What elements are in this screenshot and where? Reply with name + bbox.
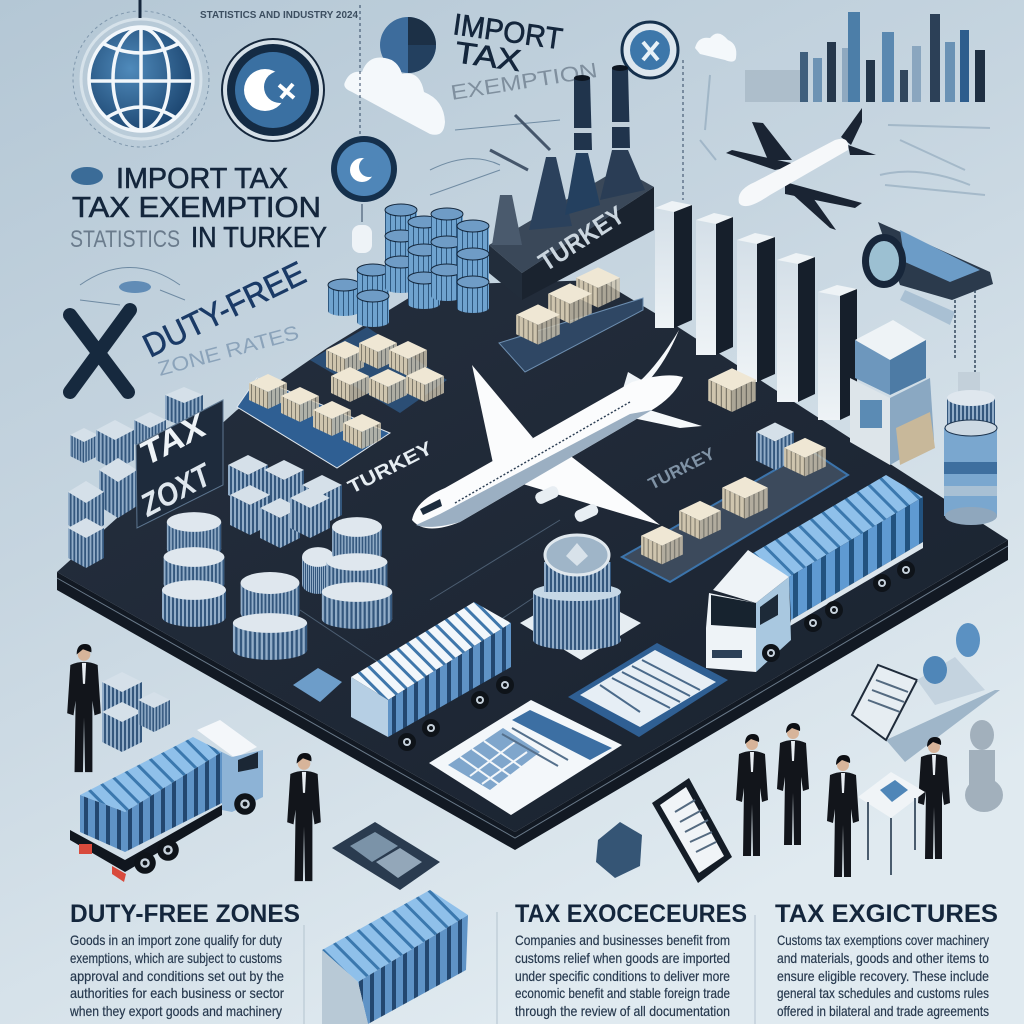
title: STATISTICS: [70, 226, 180, 253]
sign: tax zone: ZOXT: [134, 456, 219, 524]
icon: small crescent badge: [331, 136, 397, 222]
body text: ensure eligible recovery. These include: [777, 968, 989, 984]
dashed connector: [360, 5, 683, 200]
icon: globe: [73, 0, 209, 147]
body text: general tax schedules and customs rules: [777, 985, 989, 1001]
title: [70, 163, 327, 254]
truck: bottom centre: [322, 890, 468, 1024]
header microtext: STATISTICS AND INDUSTRY 2024: [200, 10, 358, 21]
icon: pie circle: [380, 17, 436, 73]
device small: [596, 822, 642, 878]
robot figure: [965, 720, 1003, 812]
body text: Goods in an import zone qualify for duty: [70, 932, 282, 948]
pallet: [332, 822, 440, 890]
body text: Companies and businesses benefit from: [515, 932, 730, 948]
panel: duty-free zones: DUTY-FREE ZONES: [70, 900, 300, 928]
building right: [850, 320, 935, 465]
crate cluster upper centre: [326, 334, 444, 404]
icon: factory: TURKEY: [533, 200, 630, 277]
tray: crates upper centre: [310, 327, 447, 413]
icon: tall buildings left: [68, 387, 203, 568]
icon: small plane: [726, 108, 876, 230]
body text: economic benefit and stable foreign trade: [515, 985, 730, 1001]
crates under factory: [516, 267, 620, 345]
right tower: [944, 372, 997, 525]
panel: isometric platform: [57, 280, 1008, 850]
body text: authorities for each business or sector: [70, 985, 284, 1001]
document: calculator sheet: [429, 700, 622, 815]
tray: crates back right: [499, 298, 643, 372]
crate solo: [708, 368, 756, 412]
icon: small tag: [352, 225, 372, 253]
top heading: [449, 8, 599, 105]
panel: duty-free zones: [69, 900, 300, 1019]
crate stack centre left: [228, 455, 342, 548]
icon: Turkey crescent badge: [222, 39, 324, 141]
top heading: EXEMPTION: [449, 59, 599, 105]
icon: camera device: [862, 222, 993, 400]
crate cluster right: [641, 422, 826, 564]
figure: left businessman: [67, 644, 101, 772]
body text: exemptions, which are subject to customs: [70, 950, 282, 966]
label: Turkey faded: TURKEY: [645, 444, 719, 494]
icon: X badge: [622, 22, 678, 78]
document: tablet on board: [568, 643, 728, 737]
icon: cloud: [344, 58, 445, 135]
sketch notes right: [700, 75, 990, 195]
display stand: [852, 623, 1000, 762]
container: mid truck: [351, 602, 514, 751]
small device on board: [293, 668, 342, 702]
body text: when they export goods and machinery: [69, 1003, 282, 1019]
body text: [69, 932, 284, 1019]
faded subtitle: ZONE RATES: [156, 322, 301, 381]
white pillars: [655, 201, 857, 420]
body text: and materials, goods and other items to: [777, 950, 989, 966]
sign: tax zone: [133, 400, 223, 528]
table: [858, 772, 925, 875]
panel: tax exemptions: TAX EXGICTURES: [775, 900, 998, 928]
tablet: [652, 778, 732, 883]
tray: crates right: [622, 450, 848, 582]
title: IN TURKEY: [191, 222, 327, 254]
body text: offered in bilateral and trade agreements: [777, 1003, 989, 1019]
bar chart: [745, 12, 985, 102]
body text: [777, 932, 989, 1019]
icon: X mark: [70, 310, 130, 392]
body text: under specific conditions to deliver more: [515, 968, 730, 984]
truck: bottom left: [70, 720, 263, 882]
duty-free heading: DUTY-FREE: [137, 254, 311, 364]
title: IMPORT TAX: [116, 163, 288, 195]
label: Turkey on board: TURKEY: [345, 438, 437, 498]
body text: [515, 932, 730, 1019]
icon: main airplane: [412, 330, 702, 529]
top heading: TAX: [453, 36, 523, 78]
panel: tax exemptions: [775, 900, 998, 1019]
big truck: [706, 475, 923, 672]
title: TAX EXEMPTION: [72, 192, 321, 224]
drums: [162, 512, 392, 660]
icon: factory: [489, 65, 654, 300]
figure: centre businessman: [287, 753, 321, 881]
crate cluster upper left: [249, 374, 381, 449]
body text: customs relief when goods are imported: [515, 950, 730, 966]
sketch notes left: [80, 120, 560, 305]
body text: through the review of all documentation: [515, 1003, 730, 1019]
cylinder stacks: [328, 204, 489, 327]
column dividers: [304, 912, 755, 1024]
body text: approval and conditions set out by the: [70, 968, 284, 984]
crates beside businessman: [102, 672, 170, 752]
tray: crates upper left: [237, 378, 390, 468]
figures: group of businessmen: [736, 723, 950, 877]
panel: tax procedures: [515, 900, 747, 1019]
sign: tax zone: TAX: [133, 406, 214, 472]
panel: tax procedures: TAX EXOCECEURES: [515, 900, 747, 928]
icon: dome building: [520, 535, 641, 660]
icon: small cloud: [695, 33, 736, 62]
top heading: IMPORT: [451, 8, 565, 56]
icon: title pill: [71, 167, 103, 185]
